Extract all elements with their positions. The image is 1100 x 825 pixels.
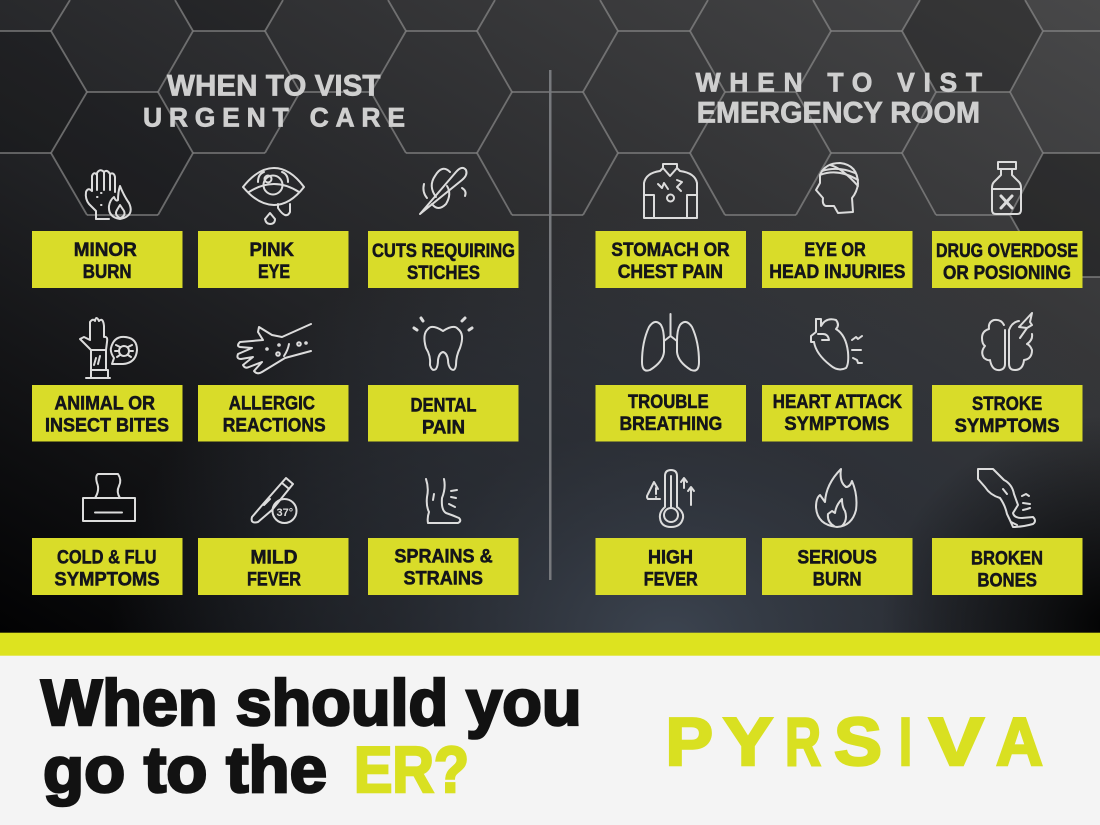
card: allergic reactions bbox=[198, 324, 348, 442]
logo: pyrsiva: S bbox=[834, 704, 882, 780]
icon: tooth bbox=[414, 318, 472, 370]
card: minor burn: MINOR bbox=[74, 239, 137, 261]
card: serious burn: BURN bbox=[813, 568, 862, 590]
yellow band bbox=[0, 633, 1100, 656]
card: dental pain: DENTAL bbox=[410, 394, 477, 416]
icon: hand with bug bubble bbox=[80, 318, 137, 378]
icon: needle and thread bbox=[420, 168, 466, 214]
card: trouble breathing bbox=[596, 314, 746, 442]
card: heart attack symptoms: HEART ATTACK bbox=[773, 391, 902, 413]
heading: when to visit urgent care: WHEN TO VIST bbox=[167, 70, 380, 103]
icon: thermometer 37 degrees bbox=[252, 478, 296, 523]
card: pink eye bbox=[198, 168, 348, 288]
hexagon pattern bbox=[0, 0, 1100, 277]
card: sprains and strains: SPRAINS & bbox=[394, 545, 493, 567]
card: heart attack symptoms bbox=[762, 319, 912, 442]
card: stomach or chest pain: STOMACH OR bbox=[611, 239, 730, 261]
icon: lungs bbox=[642, 314, 699, 371]
card: stomach or chest pain: CHEST PAIN bbox=[618, 261, 723, 283]
panel: emergency room bbox=[596, 68, 1082, 595]
card: high fever: HIGH bbox=[648, 546, 693, 568]
footer background bbox=[0, 656, 1100, 825]
card: cuts requiring stiches bbox=[368, 168, 518, 288]
center divider bbox=[549, 70, 552, 580]
card: high fever bbox=[596, 470, 746, 595]
card: cuts requiring stiches: CUTS REQUIRING bbox=[372, 240, 515, 262]
logo: pyrsiva: R bbox=[785, 704, 821, 780]
card: stroke symptoms bbox=[932, 313, 1082, 442]
card: animal or insect bites: ANIMAL OR bbox=[54, 392, 155, 414]
dark background bbox=[0, 0, 1100, 633]
icon: broken leg bbox=[978, 469, 1035, 527]
card: sprains and strains bbox=[368, 479, 518, 595]
card: sprains and strains: STRAINS bbox=[404, 567, 483, 589]
logo: pyrsiva: I bbox=[899, 704, 912, 780]
heading: when to visit urgent care: URGENT CARE bbox=[143, 103, 405, 133]
heading: when to visit emergency room: WHEN TO VIST bbox=[696, 68, 982, 98]
card: cold and flu symptoms bbox=[32, 474, 182, 595]
heading: when to visit emergency room: EMERGENCY ROOM bbox=[697, 97, 980, 130]
heading: when to visit emergency room bbox=[696, 68, 982, 130]
card: serious burn: SERIOUS bbox=[797, 546, 877, 568]
panel: urgent care bbox=[32, 70, 518, 595]
card: dental pain: PAIN bbox=[422, 416, 465, 438]
logo: pyrsiva bbox=[666, 704, 1043, 780]
icon: bandaged head bbox=[816, 163, 858, 213]
logo: pyrsiva: A bbox=[996, 704, 1043, 780]
icon: tissue box bbox=[83, 474, 135, 521]
card: trouble breathing: BREATHING bbox=[620, 413, 722, 435]
card: high fever: FEVER bbox=[644, 568, 698, 590]
icon: sprained ankle bbox=[426, 479, 460, 523]
card: stroke symptoms: SYMPTOMS bbox=[955, 415, 1060, 437]
card: stroke symptoms: STROKE bbox=[972, 393, 1042, 415]
card: eye or head injuries: EYE OR bbox=[804, 239, 866, 261]
card: minor burn bbox=[32, 170, 182, 288]
title: ER? bbox=[354, 733, 469, 806]
logo: pyrsiva: V bbox=[929, 704, 984, 780]
heading: when to visit urgent care bbox=[143, 70, 405, 133]
icon: thermometer with warning bbox=[647, 470, 694, 527]
icon: burned hand bbox=[86, 170, 131, 219]
card: mild fever bbox=[198, 478, 348, 595]
card: cold and flu symptoms: SYMPTOMS bbox=[54, 568, 160, 590]
card: minor burn: BURN bbox=[83, 261, 132, 283]
card: heart attack symptoms: SYMPTOMS bbox=[784, 413, 889, 435]
icon: brain with lightning bbox=[982, 313, 1032, 370]
title: When should you bbox=[41, 666, 582, 739]
logo: pyrsiva: Y bbox=[723, 704, 773, 780]
card: broken bones: BONES bbox=[977, 570, 1037, 592]
icon: torso with pain marks bbox=[644, 164, 697, 218]
title: go to the bbox=[43, 733, 327, 806]
card: mild fever: FEVER bbox=[247, 568, 301, 590]
card: drug overdose or posioning: OR POSIONING bbox=[943, 262, 1071, 284]
card: mild fever: MILD bbox=[250, 546, 298, 568]
card: stomach or chest pain bbox=[596, 164, 746, 288]
icon: arm with rash bbox=[237, 324, 311, 373]
icon: tearing eye bbox=[243, 168, 304, 224]
title bbox=[41, 666, 582, 806]
icon: poison bottle bbox=[992, 162, 1021, 214]
card: allergic reactions: REACTIONS bbox=[223, 414, 326, 436]
card: eye or head injuries bbox=[762, 163, 912, 288]
icon: heart with pain marks bbox=[811, 319, 862, 369]
card: pink eye: PINK bbox=[250, 239, 294, 261]
logo: pyrsiva: P bbox=[666, 704, 713, 780]
card: dental pain bbox=[368, 318, 518, 442]
card: allergic reactions: ALLERGIC bbox=[229, 392, 315, 414]
icon: thermometer 37 degrees: 37° bbox=[276, 507, 293, 519]
card: drug overdose or posioning bbox=[932, 162, 1082, 288]
card: broken bones: BROKEN bbox=[971, 548, 1043, 570]
card: pink eye: EYE bbox=[258, 261, 290, 283]
card: animal or insect bites: INSECT BITES bbox=[45, 414, 169, 436]
icon: flame bbox=[816, 469, 856, 527]
card: eye or head injuries: HEAD INJURIES bbox=[769, 261, 905, 283]
card: broken bones bbox=[932, 469, 1082, 595]
card: cold and flu symptoms: COLD & FLU bbox=[57, 546, 156, 568]
card: cuts requiring stiches: STICHES bbox=[407, 262, 480, 284]
card: animal or insect bites bbox=[32, 318, 182, 442]
card: serious burn bbox=[762, 469, 912, 595]
card: trouble breathing: TROUBLE bbox=[628, 391, 709, 413]
